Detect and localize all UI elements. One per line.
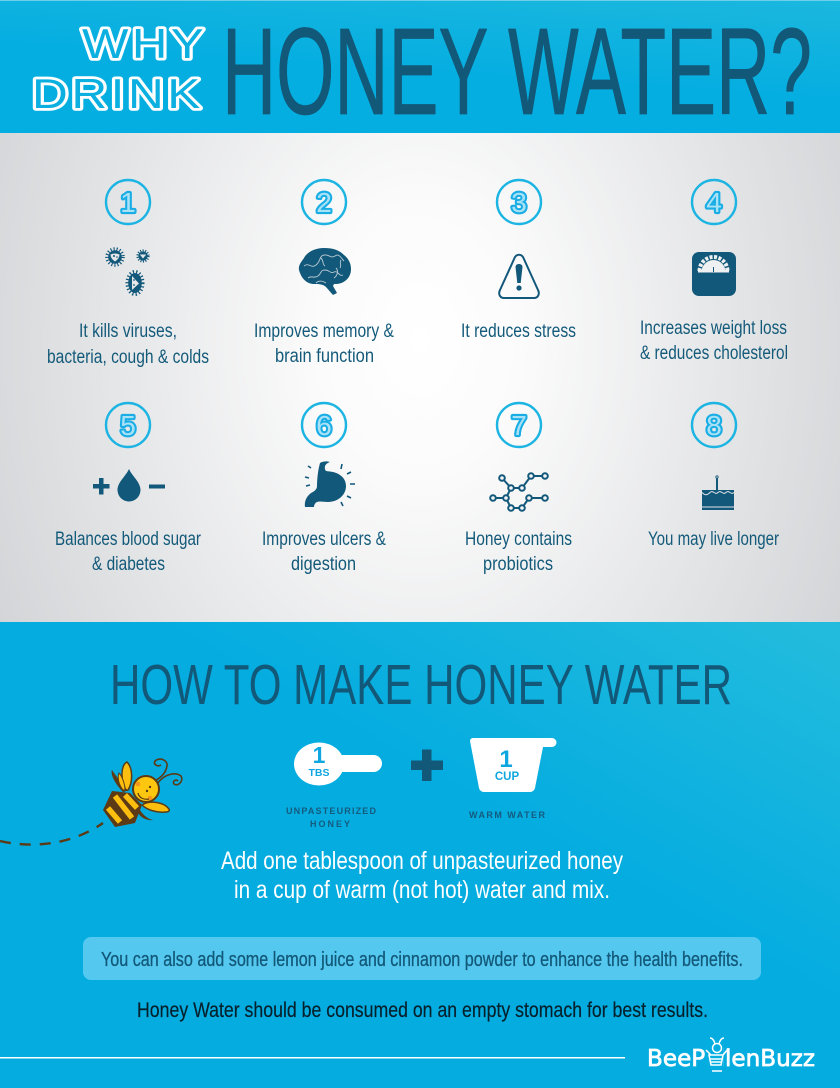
number badge 4 bbox=[692, 180, 736, 224]
number badge 4: 4 bbox=[706, 187, 722, 218]
number badge 1: 1 bbox=[120, 187, 136, 218]
number badge 3: 3 bbox=[511, 187, 527, 218]
label: Balances blood sugar bbox=[55, 529, 202, 550]
icon: brain bbox=[299, 248, 351, 295]
icon: measuring cup: 1 bbox=[499, 746, 513, 773]
label bbox=[47, 321, 209, 368]
icon: weighing scale bbox=[692, 252, 736, 296]
logo: bee pollen buzz: BeePollenBuzz bbox=[647, 1046, 815, 1072]
title: why drink: WHY bbox=[82, 20, 207, 67]
number badge 6 bbox=[302, 403, 346, 447]
header band bbox=[0, 0, 840, 133]
icon: plus bbox=[411, 750, 443, 781]
label: Improves memory & bbox=[254, 321, 394, 342]
icon: measuring cup: CUP bbox=[495, 771, 519, 783]
caption: unpasteurized honey: UNPASTEURIZED bbox=[286, 806, 376, 816]
number badge 8 bbox=[692, 403, 736, 447]
note: empty stomach: Honey Water should be consumed on an empty stomach for best results. bbox=[137, 999, 708, 1022]
label bbox=[254, 321, 394, 367]
title: why drink bbox=[32, 20, 207, 117]
number badge 2: 2 bbox=[316, 187, 332, 218]
icon: tablespoon: TBS bbox=[308, 767, 330, 779]
label: bacteria, cough & colds bbox=[47, 347, 209, 368]
icon: viruses bbox=[107, 249, 148, 294]
caption: unpasteurized honey bbox=[286, 806, 376, 829]
label: & diabetes bbox=[92, 554, 165, 575]
number badge 5: 5 bbox=[120, 410, 136, 441]
benefit 7 bbox=[465, 403, 572, 575]
label: digestion bbox=[291, 554, 356, 575]
icon: warning triangle bbox=[499, 255, 539, 298]
benefit 2 bbox=[254, 180, 394, 367]
caption: unpasteurized honey: HONEY bbox=[310, 819, 350, 829]
label: & reduces cholesterol bbox=[640, 343, 788, 364]
number badge 7: 7 bbox=[511, 410, 527, 441]
label bbox=[465, 529, 572, 575]
label: brain function bbox=[275, 346, 374, 367]
how-to panel background bbox=[0, 622, 840, 1088]
benefit 8 bbox=[648, 403, 780, 550]
label: You may live longer bbox=[648, 529, 780, 550]
instructions: in a cup of warm (not hot) water and mix. bbox=[234, 876, 610, 904]
label bbox=[262, 529, 386, 575]
icon: measuring cup bbox=[470, 738, 556, 792]
label: It kills viruses, bbox=[79, 321, 177, 342]
instructions: Add one tablespoon of unpasteurized honey bbox=[221, 847, 623, 875]
caption: warm water: WARM WATER bbox=[469, 810, 546, 820]
number badge 7 bbox=[497, 403, 541, 447]
label: It reduces stress bbox=[461, 321, 576, 342]
flight trail bbox=[0, 823, 103, 845]
icon: bee bbox=[103, 759, 182, 827]
number badge 6: 6 bbox=[316, 410, 332, 441]
benefit 5 bbox=[55, 403, 202, 575]
label: Increases weight loss bbox=[640, 318, 787, 339]
title: why drink: DRINK bbox=[32, 70, 204, 117]
icon: blood sugar drop bbox=[93, 469, 165, 502]
benefit 3 bbox=[461, 180, 576, 342]
benefits panel background bbox=[0, 133, 840, 623]
icon: molecule bbox=[490, 473, 548, 511]
label: Honey contains bbox=[465, 529, 572, 550]
icon: birthday cake bbox=[702, 476, 734, 510]
benefit 6 bbox=[262, 403, 386, 575]
icon: stomach bbox=[305, 461, 355, 507]
label bbox=[640, 318, 788, 364]
number badge 1 bbox=[106, 180, 150, 224]
number badge 3 bbox=[497, 180, 541, 224]
label: Improves ulcers & bbox=[262, 529, 386, 550]
label: probiotics bbox=[483, 554, 553, 575]
number badge 2 bbox=[302, 180, 346, 224]
number badge 5 bbox=[106, 403, 150, 447]
benefit 4 bbox=[640, 180, 788, 364]
icon: tablespoon bbox=[294, 742, 382, 786]
callout: lemon and cinnamon tip bbox=[83, 937, 761, 980]
label bbox=[55, 529, 202, 575]
instructions bbox=[221, 847, 623, 904]
icon: tablespoon: 1 bbox=[313, 742, 326, 768]
benefit 1 bbox=[47, 180, 209, 368]
number badge 8: 8 bbox=[706, 410, 722, 441]
